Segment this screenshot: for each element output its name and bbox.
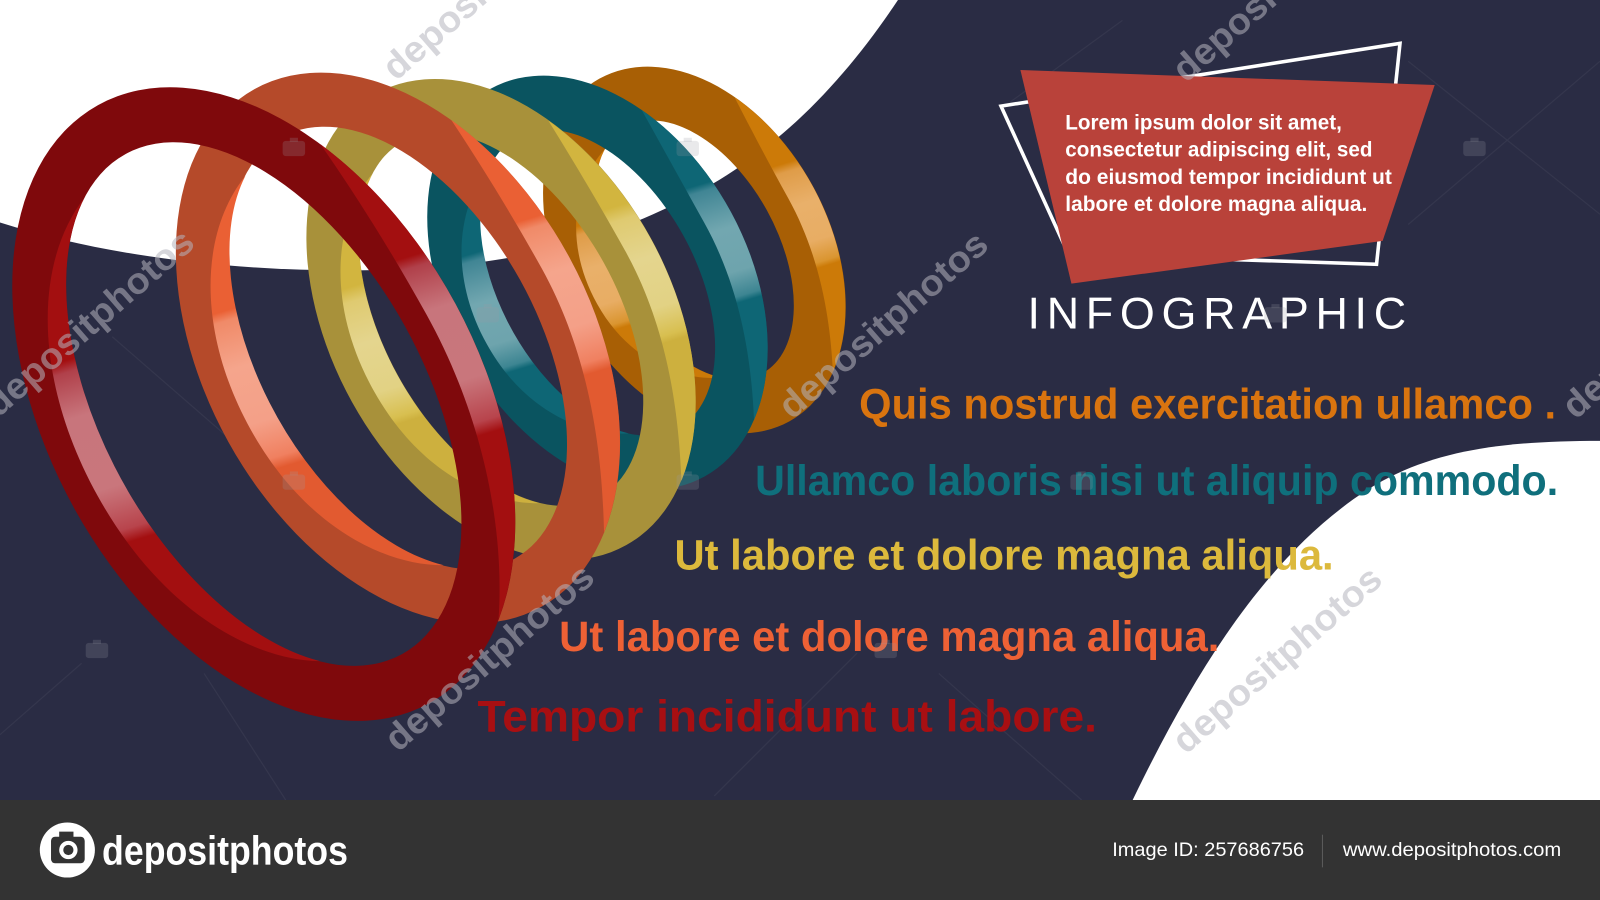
footer image id: Image ID: 257686756 [1112, 839, 1304, 861]
callout: red box with lorem text: do eiusmod tempor incididunt ut [1065, 165, 1392, 189]
white curved shape: bottom right [1133, 441, 1600, 800]
callout: red box with lorem text: consectetur adipiscing elit, sed [1065, 138, 1372, 162]
watermarks: depositphotos [1164, 557, 1390, 761]
callout: white outline frame [1001, 43, 1400, 264]
ring: orange [482, 13, 907, 487]
ring: red [0, 0, 619, 808]
watermarks: depositphotos [376, 555, 602, 759]
text line: coral: Ut labore et dolore magna aliqua. [559, 613, 1219, 661]
text line: yellow: Ut labore et dolore magna aliqua. [674, 531, 1334, 579]
text line: red: Tempor incididunt ut labore. [478, 691, 1097, 742]
concentric 3D rings [0, 0, 907, 808]
white curved shape: top left [0, 0, 898, 270]
ring: coral [85, 0, 711, 701]
ring: teal [358, 16, 837, 550]
footer logo icon [40, 822, 95, 878]
callout: red box with lorem text: Lorem ipsum dolor sit amet, [1065, 110, 1342, 134]
watermark camera icons [86, 138, 1486, 658]
watermarks: depositphotos [770, 223, 996, 426]
footer website: www.depositphotos.com [1342, 839, 1561, 861]
footer bar [0, 800, 1600, 900]
callout: red box with lorem text [1020, 70, 1435, 284]
text line: teal: Ullamco laboris nisi ut aliquip commodo. [755, 457, 1558, 505]
ring: yellow [227, 11, 775, 628]
callout: red box with lorem text: labore et dolore magna aliqua. [1065, 192, 1367, 216]
text line: orange: Quis nostrud exercitation ullamco . [859, 380, 1556, 428]
footer logo text: depositphotos [102, 827, 348, 873]
title: INFOGRAPHIC [1028, 288, 1406, 339]
